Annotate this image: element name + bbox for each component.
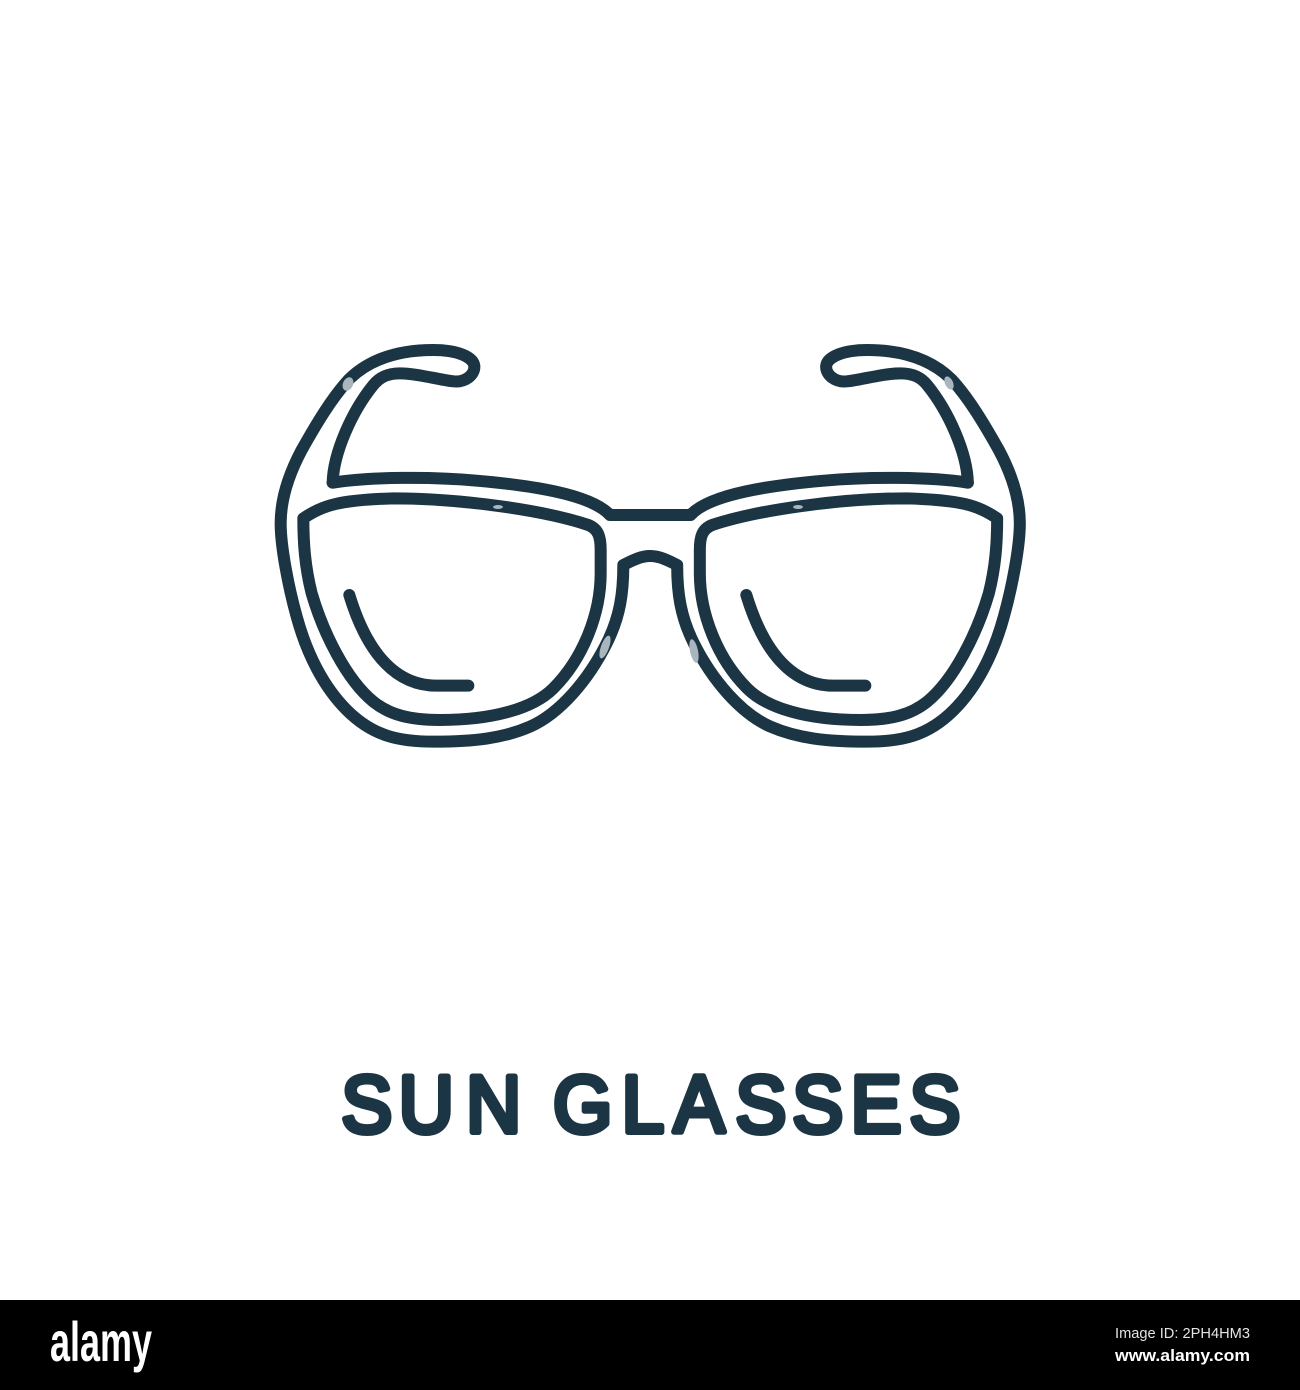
website: www.alamy.com xyxy=(1114,1346,1250,1365)
left lens highlight xyxy=(349,595,468,686)
right outer frame and temple xyxy=(651,350,1020,742)
title: SUN GLASSES xyxy=(341,1059,960,1150)
image id: Image ID: 2PH4HM3 xyxy=(1115,1325,1250,1342)
right lens highlight xyxy=(746,595,865,686)
right half of frame xyxy=(651,350,1020,742)
icon: sunglasses xyxy=(281,350,1020,742)
left outer frame and temple xyxy=(281,350,650,742)
right top bar and bridge xyxy=(651,478,968,515)
footer background xyxy=(0,1300,1300,1390)
right lens rim xyxy=(700,498,997,720)
alamy logo: alamy xyxy=(50,1310,152,1373)
watermark fragments xyxy=(341,375,956,664)
left lens rim xyxy=(303,498,601,720)
footer bar xyxy=(0,1300,1300,1390)
left half of frame xyxy=(281,350,650,742)
left top bar and bridge xyxy=(333,478,650,515)
